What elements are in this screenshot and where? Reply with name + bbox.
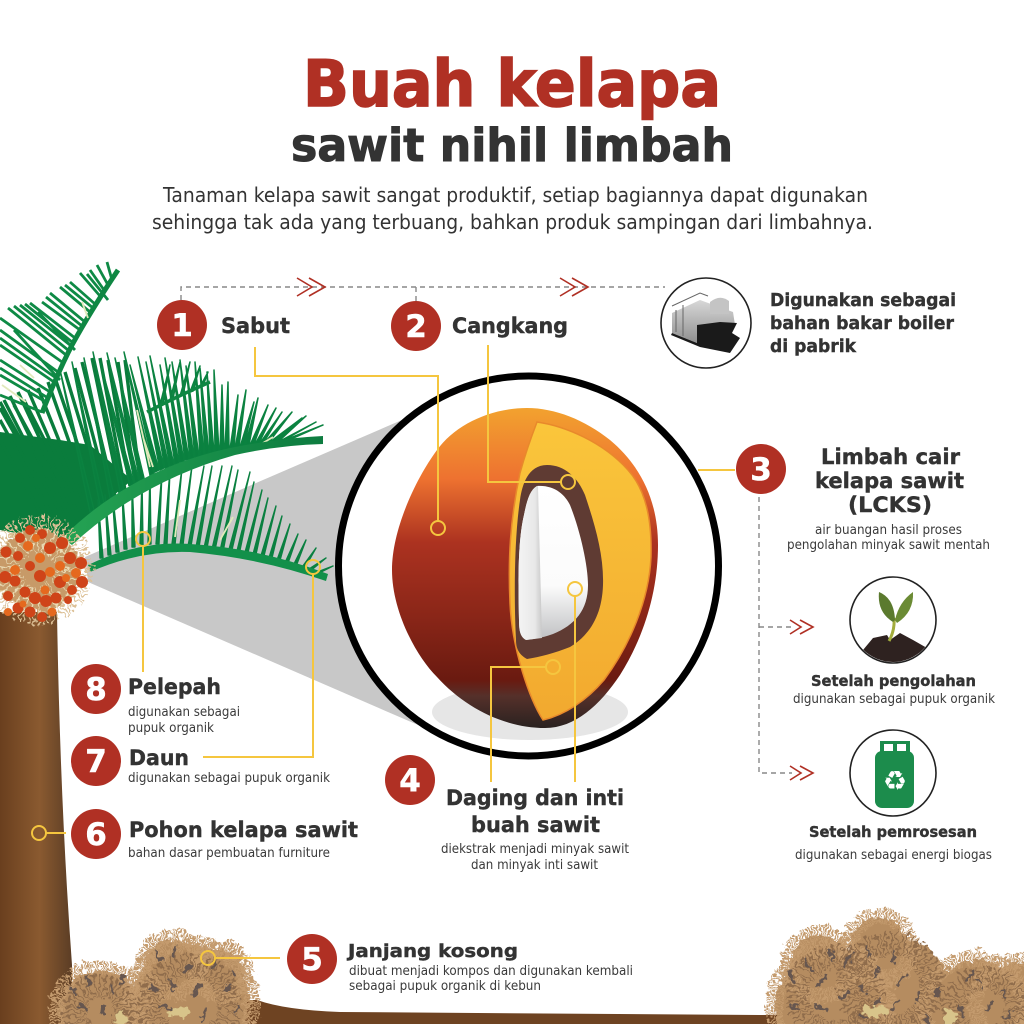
gray magnifier cone xyxy=(85,410,425,728)
item 6: Pohon kelapa sawit: Pohon kelapa sawit xyxy=(129,818,358,842)
frond leaflets top xyxy=(0,262,112,412)
title xyxy=(291,48,733,172)
item 8: Pelepah: pupuk organik xyxy=(128,721,214,736)
frond rachis middle xyxy=(62,436,323,545)
item 7: Daun: 7 xyxy=(85,744,107,780)
fruit mesocarp face xyxy=(509,422,651,720)
light fruits xyxy=(4,534,81,616)
frond leaflets lower xyxy=(98,466,333,575)
item 3: LCKS: pengolahan minyak sawit mentah xyxy=(787,538,990,553)
item 8: Pelepah: Pelepah xyxy=(128,675,221,699)
icon: boiler xyxy=(661,278,751,368)
item 5: Janjang kosong: 5 xyxy=(301,942,323,978)
item 5: Janjang kosong: sebagai pupuk organik di kebun xyxy=(349,979,541,994)
empty fruit bunches right xyxy=(773,916,1024,1024)
intro text: Tanaman kelapa sawit sangat produktif, setiap bagiannya dapat digunakan xyxy=(162,183,868,207)
item 4: Daging dan inti: dan minyak inti sawit xyxy=(471,858,598,873)
item 1: Sabut xyxy=(157,300,290,350)
title: Buah kelapa xyxy=(303,48,721,122)
item 4: Daging dan inti: buah sawit xyxy=(471,813,600,837)
item 6: Pohon kelapa sawit: 6 xyxy=(85,817,107,853)
item 4: Daging dan inti: 4 xyxy=(399,763,421,799)
arrow xyxy=(560,278,588,296)
item 2: Cangkang xyxy=(391,301,568,351)
text: boiler use xyxy=(770,290,956,357)
frond mass leaflets xyxy=(0,358,140,530)
item 3: LCKS: (LCKS) xyxy=(848,493,932,517)
arrow xyxy=(790,620,813,634)
item 5: Janjang kosong xyxy=(287,934,633,994)
item 3: LCKS: 3 xyxy=(750,452,772,488)
item 4: Daging dan inti xyxy=(385,755,629,873)
item 2: Cangkang: 2 xyxy=(405,309,427,345)
icon: biogas cylinder: ♻ xyxy=(883,766,907,797)
item 1: Sabut: Sabut xyxy=(221,314,290,338)
item 5: Janjang kosong: Janjang kosong xyxy=(346,941,518,962)
item 8: Pelepah xyxy=(71,664,240,736)
frond leaflets middle xyxy=(60,352,323,512)
item 2: Cangkang: Cangkang xyxy=(452,314,568,338)
item 7: Daun xyxy=(71,736,330,786)
oil palm fruit bunch xyxy=(0,522,88,622)
shell xyxy=(515,465,603,659)
item 5: Janjang kosong: dibuat menjadi kompos dan digunakan kembali xyxy=(349,964,633,979)
item 3: LCKS: Limbah cair xyxy=(821,445,961,469)
text: boiler use: bahan bakar boiler xyxy=(770,313,954,334)
text: after processing xyxy=(795,823,992,863)
ground xyxy=(240,1000,1024,1024)
dashed flow right xyxy=(759,497,813,780)
magnified fruit circle xyxy=(338,376,718,756)
item 3: LCKS: air buangan hasil proses xyxy=(815,523,962,538)
item 1: Sabut: 1 xyxy=(171,308,193,344)
item 8: Pelepah: 8 xyxy=(85,672,107,708)
text: after treatment: digunakan sebagai pupuk organik xyxy=(793,692,995,707)
empty fruit bunches left xyxy=(56,937,252,1024)
text: boiler use: di pabrik xyxy=(770,336,857,357)
text: after treatment: Setelah pengolahan xyxy=(811,672,976,690)
frond rachis small xyxy=(147,382,210,412)
item 3: LCKS: kelapa sawit xyxy=(815,469,964,493)
callout lines xyxy=(32,345,735,965)
kernel shade xyxy=(519,486,542,640)
text: after processing: Setelah pemrosesan xyxy=(809,823,977,841)
item 4: Daging dan inti: diekstrak menjadi minyak sawit xyxy=(441,842,629,857)
dark fruits xyxy=(0,525,88,622)
arrow xyxy=(790,766,813,780)
frond rachis lower xyxy=(88,543,328,581)
frond rachis top xyxy=(42,270,118,413)
text: boiler use: Digunakan sebagai xyxy=(770,290,956,311)
item 6: Pohon kelapa sawit: bahan dasar pembuatan furniture xyxy=(128,846,330,861)
item 8: Pelepah: digunakan sebagai xyxy=(128,705,240,720)
palm fronds xyxy=(0,262,333,581)
icon: sapling xyxy=(850,577,936,664)
intro text xyxy=(152,183,873,234)
text: after processing: digunakan sebagai energi biogas xyxy=(795,848,992,863)
palm tree trunk xyxy=(0,612,72,1024)
item 3: LCKS xyxy=(736,444,990,553)
frond mass xyxy=(0,432,132,542)
arrow xyxy=(297,278,325,296)
item 7: Daun: digunakan sebagai pupuk organik xyxy=(128,771,330,786)
frond pale streaks xyxy=(2,302,273,540)
item 7: Daun: Daun xyxy=(129,746,189,770)
text: after treatment xyxy=(793,672,995,707)
icon: biogas cylinder xyxy=(850,730,936,816)
fruit shadow xyxy=(432,694,628,740)
dashed flow top xyxy=(181,278,665,302)
item 6: Pohon kelapa sawit xyxy=(71,809,358,861)
item 4: Daging dan inti: Daging dan inti xyxy=(446,786,624,810)
title: sawit nihil limbah xyxy=(291,119,733,172)
intro text: sehingga tak ada yang terbuang, bahkan produk sampingan dari limbahnya. xyxy=(152,210,873,234)
kernel xyxy=(519,486,588,640)
fruit body xyxy=(392,408,658,728)
bunch fibres xyxy=(0,522,86,618)
